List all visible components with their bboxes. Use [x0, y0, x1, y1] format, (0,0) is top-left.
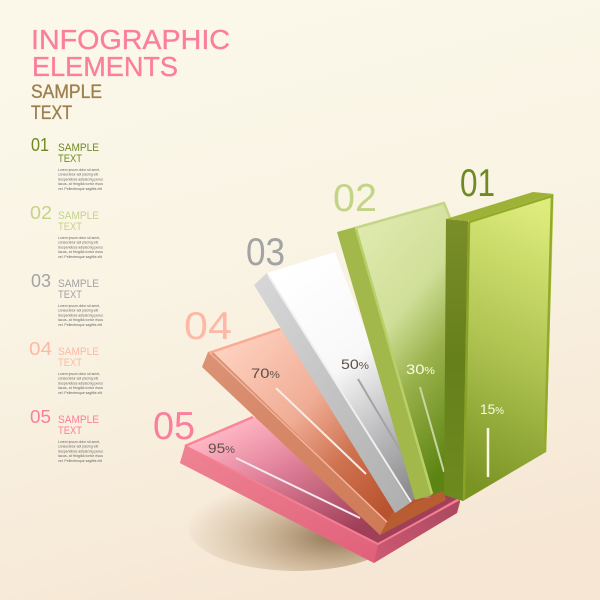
- bar 05: pink: [180, 417, 460, 563]
- list item 04: consectetur adi piscing elit.: [58, 376, 99, 381]
- list item 03: lacus, at fringilla tortor risus: [58, 317, 103, 322]
- list item 01: consectetur adi piscing elit.: [58, 172, 99, 177]
- label 50%: 50%: [341, 356, 369, 372]
- list item 05: lacus, at fringilla tortor risus: [58, 453, 103, 458]
- list item 01: SAMPLE: [58, 142, 99, 154]
- list item 03: consectetur adi piscing elit.: [58, 308, 99, 313]
- big number 01: 01: [460, 162, 495, 205]
- list item 04: lacus, at fringilla tortor risus: [58, 385, 103, 390]
- list item 01: 01: [31, 135, 49, 155]
- big number 05: 05: [153, 405, 195, 448]
- list item 03: [31, 271, 103, 327]
- list item 05: Suspendisse adipiscing purus: [58, 448, 103, 453]
- big number 03: 03: [246, 231, 285, 274]
- list item 02: 02: [30, 203, 52, 223]
- progress line 30%: [420, 387, 444, 472]
- list item 04: TEXT: [58, 357, 82, 369]
- list item 03: vel. Pellentesque sagittis elit: [58, 322, 103, 327]
- list item 02: TEXT: [58, 221, 82, 233]
- list item 05: vel. Pellentesque sagittis elit: [58, 458, 103, 463]
- list item 03: SAMPLE: [58, 278, 99, 290]
- list item 05: [30, 407, 103, 463]
- label 30%: 30 %: [406, 361, 435, 377]
- title: INFOGRAPHIC: [31, 24, 230, 55]
- big number 02: 02: [333, 177, 377, 220]
- list item 05: consectetur adi piscing elit.: [58, 444, 99, 449]
- list item 03: Suspendisse adipiscing purus: [58, 312, 103, 317]
- list item 05: 05: [30, 407, 51, 427]
- list item 04: [29, 339, 103, 395]
- title: [31, 24, 230, 82]
- list item 05: SAMPLE: [58, 414, 99, 426]
- list item 03: TEXT: [58, 289, 82, 301]
- subtitle: [31, 82, 102, 124]
- title: ELEMENTS: [32, 51, 178, 82]
- progress line 15%: [487, 428, 489, 477]
- bar 03: white: [254, 252, 430, 513]
- progress line 50%: [358, 379, 400, 450]
- list item 01: [31, 135, 103, 191]
- list item 02: vel. Pellentesque sagittis elit: [58, 254, 103, 259]
- list item 03: 03: [31, 271, 51, 291]
- list item 03: Lorem ipsum dolor sit amet,: [58, 303, 100, 308]
- bar 02: light green: [337, 202, 452, 500]
- list item 05: Lorem ipsum dolor sit amet,: [58, 439, 100, 444]
- big number 04: 04: [184, 305, 232, 348]
- list item 01: Suspendisse adipiscing purus: [58, 176, 103, 181]
- list item 01: lacus, at fringilla tortor risus: [58, 181, 103, 186]
- list item 04: 04: [29, 339, 52, 359]
- subtitle: TEXT: [31, 103, 72, 124]
- list item 04: vel. Pellentesque sagittis elit: [58, 390, 103, 395]
- list item 01: Lorem ipsum dolor sit amet,: [58, 167, 100, 172]
- label 95%: 95%: [208, 440, 235, 456]
- list item 02: [30, 203, 103, 259]
- list item 04: Lorem ipsum dolor sit amet,: [58, 371, 100, 376]
- list item 02: lacus, at fringilla tortor risus: [58, 249, 103, 254]
- list item 02: SAMPLE: [58, 210, 99, 222]
- list item 04: Suspendisse adipiscing purus: [58, 380, 103, 385]
- subtitle: SAMPLE: [31, 82, 102, 103]
- list item 02: Suspendisse adipiscing purus: [58, 244, 103, 249]
- label 15%: 15%: [480, 401, 504, 417]
- label 70%: 70 %: [251, 365, 280, 381]
- bar 04: salmon: [202, 328, 446, 535]
- progress line 70%: [276, 388, 366, 474]
- progress line 95%: [236, 458, 360, 518]
- list item 05: TEXT: [58, 425, 82, 437]
- list item 02: consectetur adi piscing elit.: [58, 240, 99, 245]
- list item 02: Lorem ipsum dolor sit amet,: [58, 235, 100, 240]
- list item 04: SAMPLE: [58, 346, 99, 358]
- list item 01: vel. Pellentesque sagittis elit: [58, 186, 103, 191]
- bar 01: dark green: [444, 192, 554, 501]
- ground shadow: [188, 483, 404, 571]
- list item 01: TEXT: [58, 153, 82, 165]
